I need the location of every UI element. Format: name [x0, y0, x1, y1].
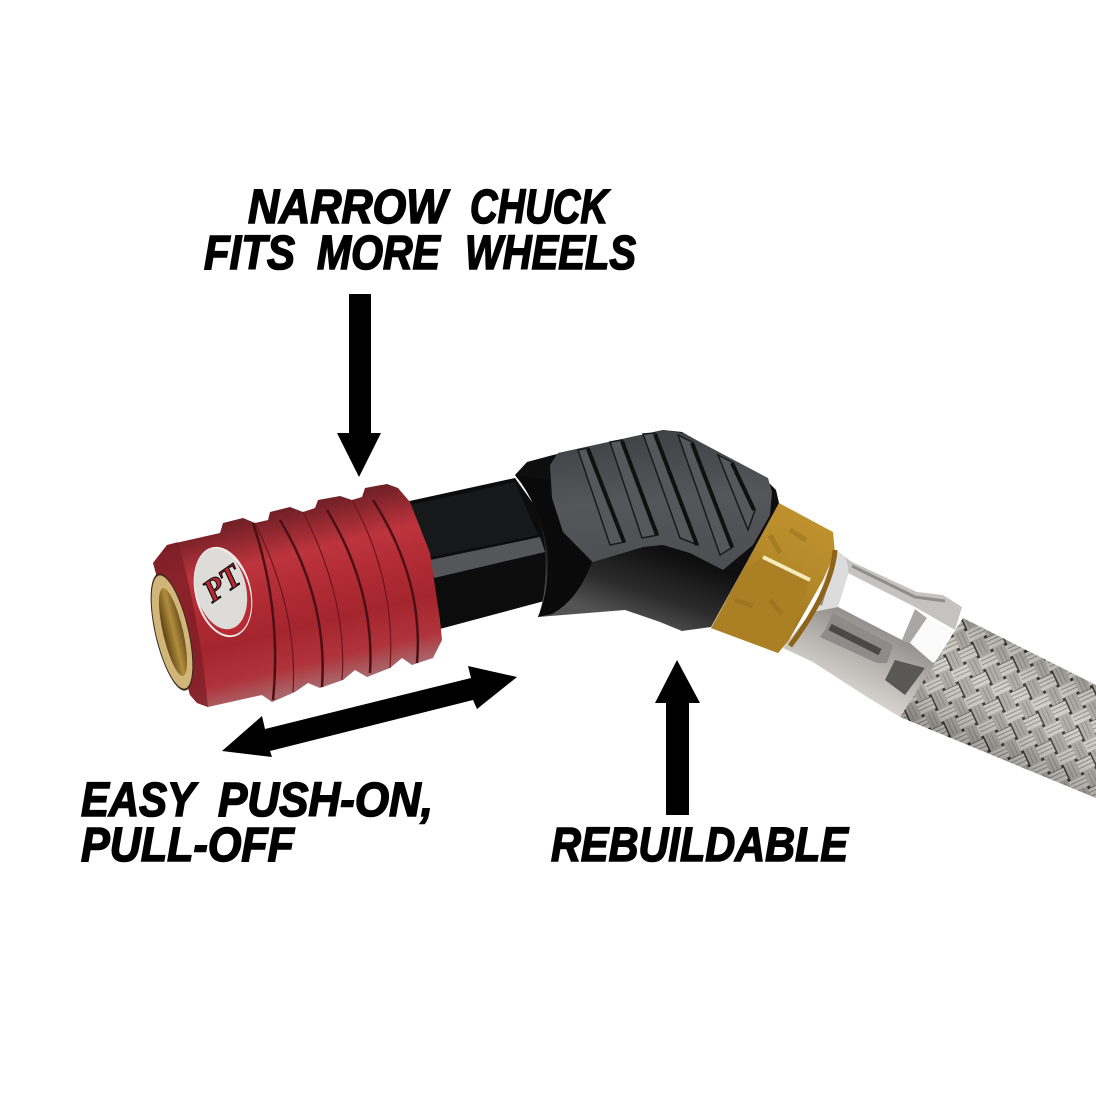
label: rebuildable: REBUILDABLE [551, 819, 850, 872]
heading: narrow chuck: FITS [204, 227, 295, 280]
label: easy push-on, pull-off [81, 774, 433, 872]
black elbow body [515, 430, 779, 631]
arrow: push and pull double-headed [222, 666, 517, 757]
label: easy push-on, pull-off: PULL-OFF [81, 819, 296, 872]
brass bore [142, 570, 202, 694]
heading: narrow chuck [204, 181, 636, 280]
PT logo: PT [195, 556, 250, 610]
PT logo [185, 541, 261, 643]
heading: narrow chuck: CHUCK [470, 181, 611, 234]
arrow: down to chuck [337, 294, 381, 477]
heading: narrow chuck: NARROW [248, 181, 450, 234]
heading: narrow chuck: MORE [317, 227, 442, 280]
steel ferrule [783, 550, 962, 717]
arrow: up to rebuildable elbow [655, 660, 700, 815]
label: easy push-on, pull-off: EASY [81, 774, 198, 827]
label: easy push-on, pull-off: PUSH-ON, [218, 774, 433, 827]
red anodized chuck [142, 484, 442, 707]
black hex shaft [405, 478, 548, 630]
brass hex nut [711, 503, 835, 653]
braided hose [900, 618, 1096, 798]
ribbed rubber pad [550, 430, 772, 570]
heading: narrow chuck: WHEELS [465, 227, 636, 280]
hose assembly photo illustration [142, 430, 1096, 798]
front bevel [153, 542, 208, 707]
